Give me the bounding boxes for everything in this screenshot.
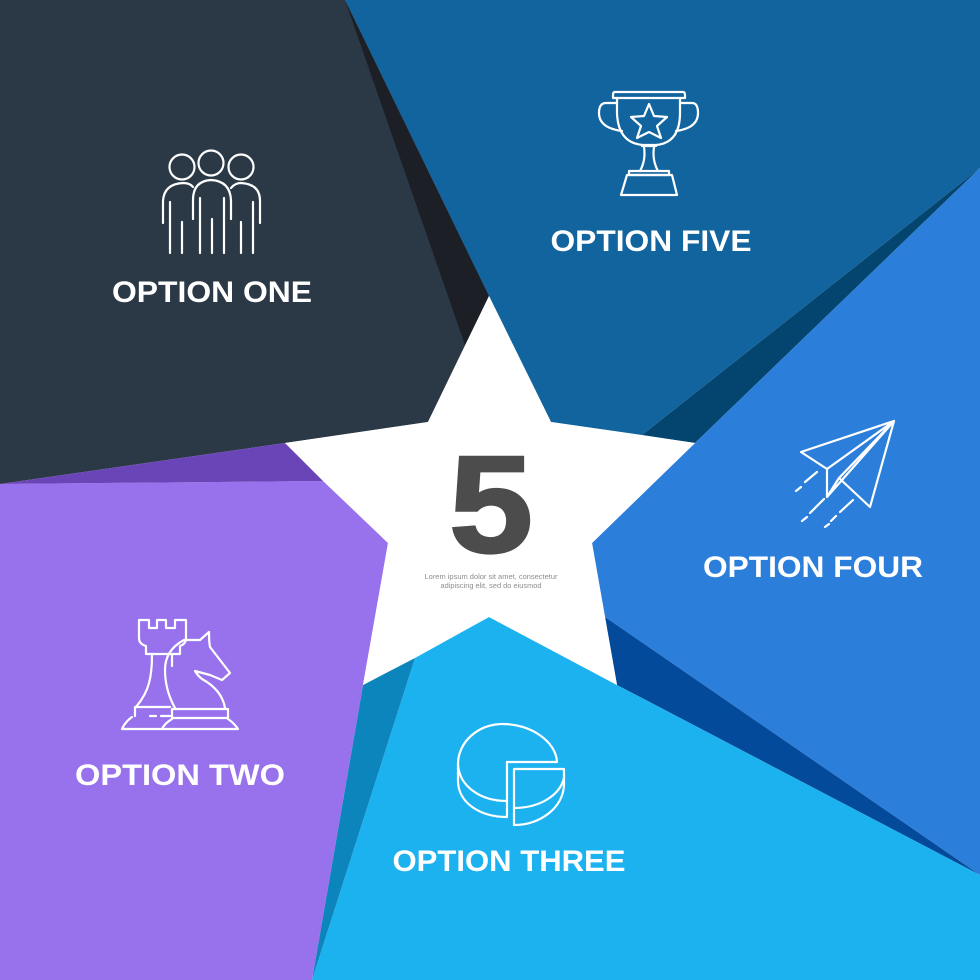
panel: option one [0,0,489,484]
icon: trophy [599,92,698,195]
panel: option five [345,0,980,443]
star description text: adipiscing elit, sed do eiusmod [440,581,542,590]
heading: option one: OPTION ONE [112,276,312,309]
icon: pie chart [458,724,564,825]
heading: option four: OPTION FOUR [703,551,923,584]
icon: paper plane [796,421,894,527]
big number 5: 5 [449,428,533,582]
heading: option three: OPTION THREE [392,845,626,878]
star description text [424,572,558,590]
star description text: Lorem ipsum dolor sit amet, consectetur [424,572,558,581]
center star [285,296,695,685]
panel: option two [0,443,388,980]
heading: option two: OPTION TWO [75,759,285,792]
icon: chess pieces [122,620,238,729]
panel: option three [312,617,980,980]
heading: option five: OPTION FIVE [550,225,752,258]
icon: people [163,150,260,253]
panel: option four [592,168,980,875]
